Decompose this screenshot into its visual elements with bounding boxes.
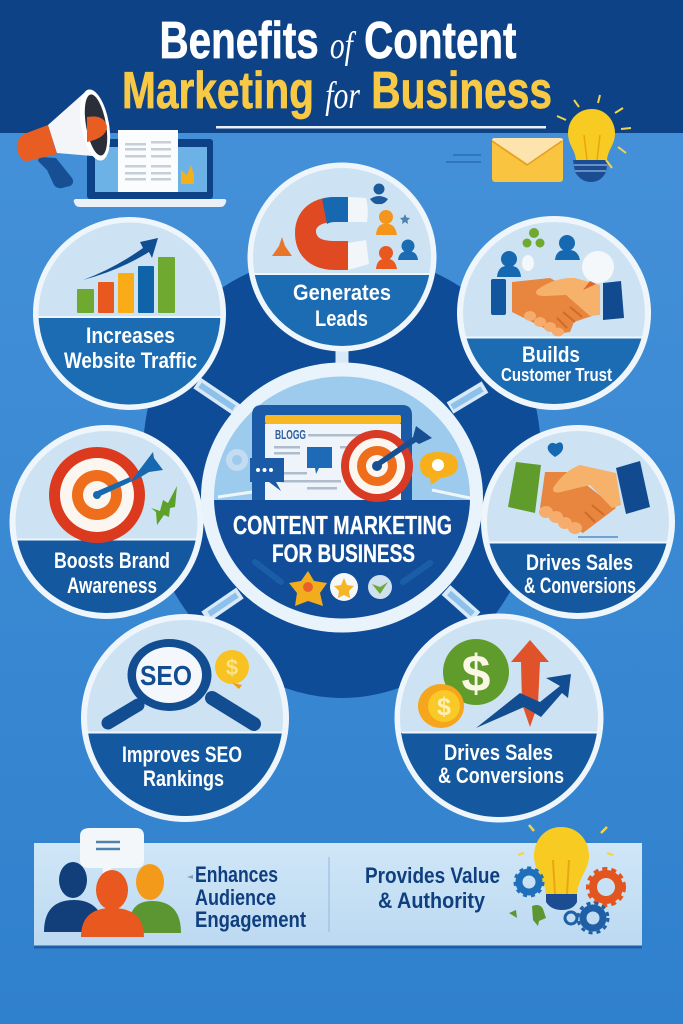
text: provides value and authority: Provides Value <box>365 863 500 888</box>
title: Benefits of Content <box>160 12 516 70</box>
text: provides value and authority <box>365 863 500 913</box>
hub: dark shape <box>142 255 542 698</box>
hub connectors <box>197 345 485 617</box>
center heading: CONTENT MARKETING <box>233 510 452 540</box>
icon: central target <box>341 426 432 502</box>
icon: bar chart with arrow <box>77 238 175 313</box>
panel: increases website traffic <box>33 217 227 412</box>
panel: builds customer trust <box>457 216 652 413</box>
icon: light bulb <box>557 95 631 182</box>
label: Drives Sales <box>526 550 633 575</box>
label <box>64 323 197 373</box>
text: enhances audience engagement: Audience <box>195 885 276 910</box>
label: Awareness <box>67 573 157 598</box>
panel: bottom banner <box>34 825 642 948</box>
icon: blog browser <box>229 405 412 500</box>
icon: people <box>370 184 418 269</box>
icon: blog browser: BLOGG <box>275 428 306 442</box>
panel: content marketing for business <box>201 362 483 632</box>
title underline <box>216 126 546 128</box>
label <box>438 740 564 788</box>
label: Rankings <box>143 766 224 791</box>
label: Increases <box>86 323 175 348</box>
label: & Conversions <box>524 573 636 598</box>
center heading: FOR BUSINESS <box>272 540 415 568</box>
label: Generates <box>293 280 391 305</box>
label: Improves SEO <box>122 742 242 767</box>
icon: dollar coins and arrows <box>418 639 571 728</box>
label <box>122 742 242 791</box>
label: Leads <box>315 306 368 331</box>
label <box>293 280 391 331</box>
label: Customer Trust <box>501 365 612 385</box>
label: Drives Sales <box>444 740 553 765</box>
icon: magnifier with seo: $ <box>226 655 238 680</box>
label <box>54 548 170 598</box>
icon: magnifier with seo <box>108 639 254 724</box>
icon: dollar coins and arrows: $ <box>462 645 491 703</box>
icon: envelope <box>446 138 563 182</box>
icon: megaphone <box>17 87 115 188</box>
panel: drives sales and conversions <box>480 425 675 628</box>
icon: dollar coins and arrows: $ <box>437 693 451 721</box>
icon: handshake <box>491 278 624 336</box>
panel: boosts brand awareness <box>10 425 205 625</box>
panel: generates leads <box>248 162 438 354</box>
panel: improves seo rankings <box>80 614 290 823</box>
icon: target <box>49 447 177 543</box>
label <box>501 342 612 385</box>
center heading <box>233 510 452 568</box>
panel: drives sales and conversions <box>394 614 605 823</box>
text: enhances audience engagement: Engagement <box>195 907 307 932</box>
icon: light bulb and gears <box>509 825 624 933</box>
icon: location bubble <box>420 452 458 485</box>
label: Website Traffic <box>64 348 197 373</box>
label <box>524 550 636 598</box>
icon: audience people <box>44 828 181 937</box>
label: Boosts Brand <box>54 548 170 573</box>
label: Builds <box>522 342 580 367</box>
icon: magnifier with seo: SEO <box>140 660 192 691</box>
title <box>122 12 552 120</box>
icon: laptop with document <box>74 130 226 207</box>
icon: magnet <box>272 197 369 270</box>
header band <box>0 0 683 133</box>
text: enhances audience engagement: Enhances <box>195 862 278 887</box>
label: & Conversions <box>438 763 564 788</box>
icon: people and speech bubbles <box>497 228 614 290</box>
text: enhances audience engagement <box>187 862 307 932</box>
icon: handshake <box>508 442 650 537</box>
text: provides value and authority: & Authority <box>378 888 486 913</box>
icon: stars and check badges <box>289 571 392 606</box>
title: Marketing for Business <box>122 62 552 120</box>
